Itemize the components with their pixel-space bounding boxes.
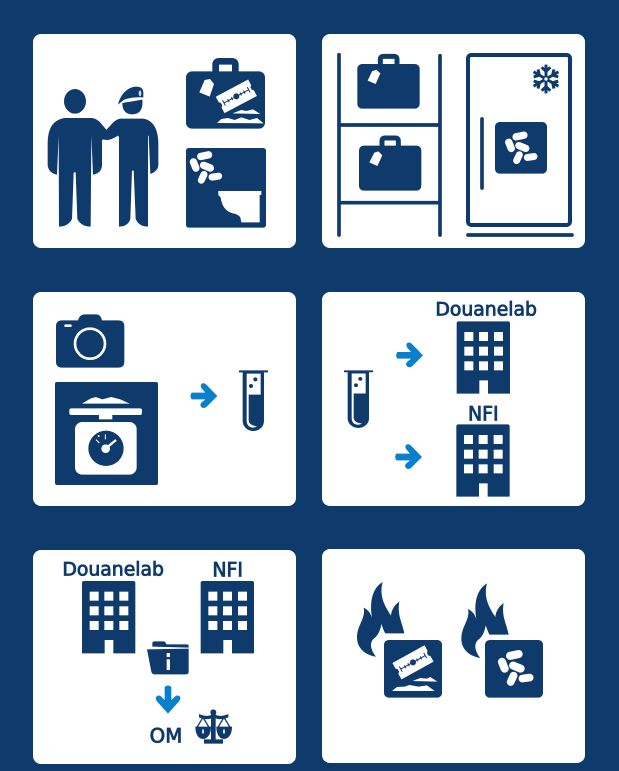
icon: suitcase upper bbox=[357, 56, 420, 109]
icon: NFI building bbox=[201, 581, 254, 653]
icon: civilian figure bbox=[48, 89, 108, 227]
arrow bbox=[190, 383, 217, 408]
icon: flame left bbox=[357, 582, 404, 657]
arrow: down to OM bbox=[156, 686, 180, 714]
icon: NFI building bbox=[456, 424, 510, 497]
arrow: to NFI bbox=[395, 444, 422, 469]
panel: photograph and weigh, then sample bbox=[33, 292, 296, 506]
icon: customs officer figure bbox=[102, 87, 158, 227]
heading: Douanelab: Douanelab bbox=[62, 559, 164, 580]
icon: scales of justice bbox=[195, 709, 232, 744]
icon: pills and toilet bbox=[186, 148, 266, 228]
icon: test tube bbox=[344, 370, 373, 428]
heading: NFI: NFI bbox=[468, 403, 499, 426]
icon: test tube bbox=[239, 370, 268, 431]
panel: reports to prosecutor bbox=[33, 550, 296, 764]
icon: pills box bbox=[485, 640, 543, 698]
heading: Douanelab: Douanelab bbox=[435, 299, 537, 320]
icon: pills box bbox=[495, 122, 547, 174]
icon: weighing scale with powder bbox=[55, 382, 158, 485]
panel: people with luggage and toilet bbox=[33, 34, 296, 248]
heading: NFI: NFI bbox=[212, 559, 243, 582]
icon: suitcase with razor and powder bbox=[186, 61, 265, 129]
panel: sample sent to labs bbox=[322, 292, 585, 506]
label: OM: OM bbox=[150, 724, 182, 747]
panel: destruction by fire bbox=[322, 549, 585, 763]
icon: snowflake bbox=[531, 65, 561, 93]
panel: luggage rack and freezer bbox=[322, 34, 585, 248]
icon: Douanelab building bbox=[457, 321, 510, 394]
icon: freezer bbox=[468, 55, 572, 235]
icon: flame right bbox=[461, 583, 509, 658]
icon: Douanelab building bbox=[82, 581, 135, 653]
arrow: to Douanelab bbox=[396, 342, 423, 367]
icon: razor and powder box bbox=[384, 640, 442, 698]
icon: information folder bbox=[147, 641, 189, 674]
icon: camera bbox=[56, 314, 124, 368]
icon: shelving rack bbox=[339, 55, 440, 235]
icon: suitcase lower bbox=[359, 138, 421, 191]
